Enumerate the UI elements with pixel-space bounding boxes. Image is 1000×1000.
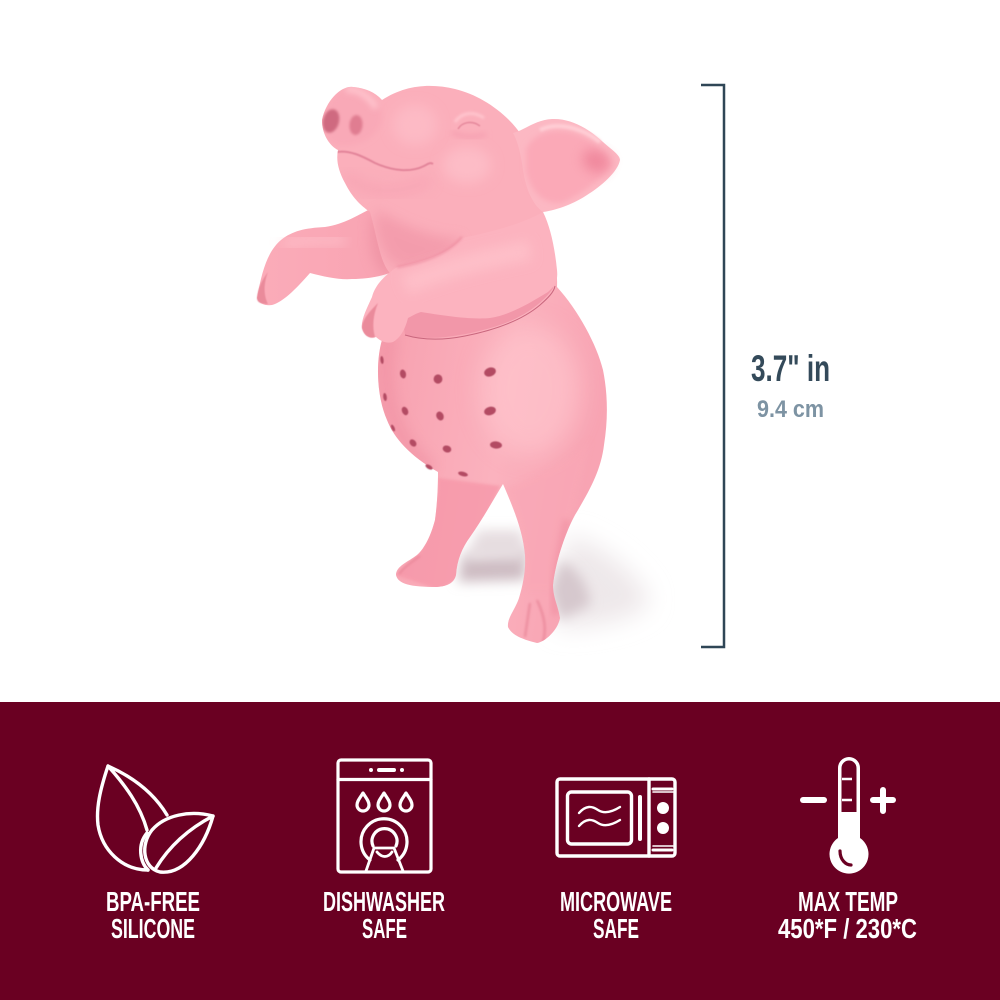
pig tea infuser bbox=[257, 86, 620, 643]
back hoof bbox=[257, 272, 268, 304]
toe lines bbox=[525, 600, 545, 642]
under-arm shade bbox=[404, 287, 554, 338]
icon: leaves bbox=[97, 766, 213, 872]
measurement centimetres: 9.4 cm bbox=[757, 396, 824, 423]
panel: features band bbox=[0, 702, 1000, 1000]
label: max temp bbox=[778, 886, 917, 944]
label: microwave safe: MICROWAVE bbox=[560, 886, 672, 917]
measurement inches: 3.7" in bbox=[751, 348, 830, 389]
back arm bbox=[257, 208, 410, 305]
icon: dishwasher bbox=[338, 760, 431, 872]
neck crease bbox=[397, 237, 462, 267]
head shading bbox=[447, 150, 487, 180]
nostrils bbox=[322, 108, 340, 134]
label: dishwasher safe: DISHWASHER bbox=[323, 886, 445, 917]
label: dishwasher safe bbox=[323, 886, 445, 944]
ear bbox=[513, 119, 620, 212]
label: max temp: 450*F / 230*C bbox=[778, 913, 917, 944]
infuser holes bbox=[380, 356, 502, 477]
head and neck bbox=[320, 86, 557, 290]
label: BPA-free silicone bbox=[106, 886, 200, 944]
snout bbox=[322, 87, 348, 136]
mouth bbox=[337, 152, 433, 170]
label: BPA-free silicone: SILICONE bbox=[111, 913, 195, 944]
label: microwave safe: SAFE bbox=[593, 913, 639, 944]
body and legs bbox=[378, 280, 607, 643]
front arm bbox=[362, 212, 557, 343]
icon: microwave bbox=[557, 779, 675, 856]
eye bbox=[458, 122, 480, 129]
height bracket bbox=[701, 85, 724, 647]
label: dishwasher safe: SAFE bbox=[362, 913, 407, 944]
pig shadow bbox=[458, 530, 650, 628]
label: microwave safe bbox=[560, 886, 672, 944]
label: BPA-free silicone: BPA-FREE bbox=[106, 886, 200, 917]
icon: thermometer bbox=[803, 757, 893, 874]
front hoof bbox=[362, 303, 378, 338]
label: max temp: MAX TEMP bbox=[798, 886, 898, 917]
seam line bbox=[405, 286, 555, 339]
